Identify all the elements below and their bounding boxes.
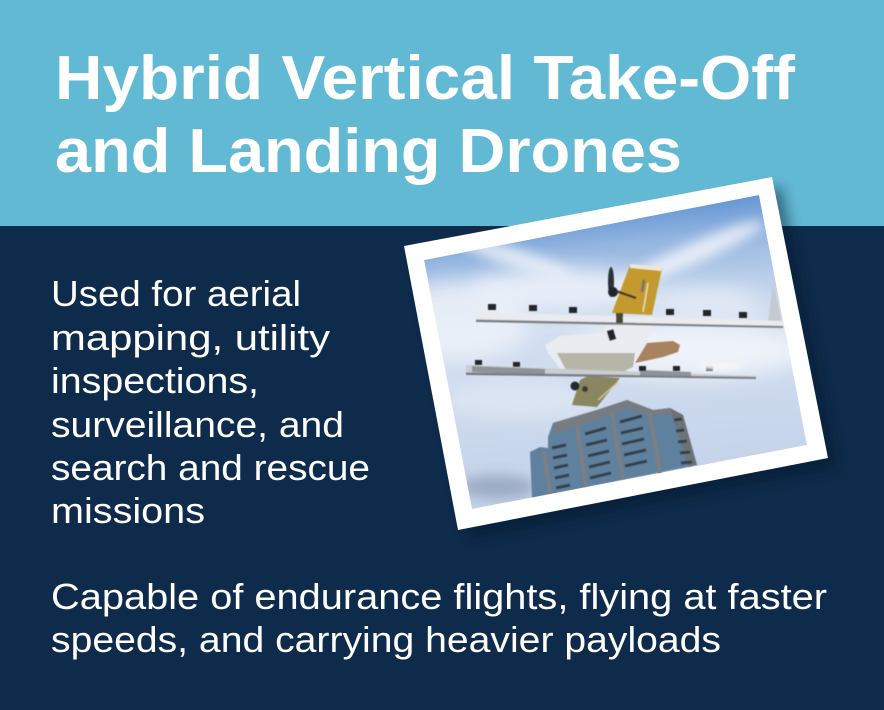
rear fin [768, 282, 782, 322]
rotor blur [704, 364, 738, 372]
clouds [427, 214, 792, 419]
title: and Landing Drones [55, 117, 682, 186]
text block: uses: missions [51, 490, 205, 531]
text block: uses: inspections, [51, 360, 259, 401]
title: Hybrid Vertical Take-Off [55, 44, 795, 113]
photo [390, 195, 810, 509]
text block: capabilities: Capable of endurance flights, flying at faster [51, 576, 827, 617]
photo card: drone over building [390, 177, 828, 530]
lower wing boom [466, 365, 756, 378]
front propeller [608, 267, 614, 297]
dark cloud patch [459, 475, 535, 499]
text block: uses: surveillance, and [51, 404, 344, 445]
upper wing [476, 313, 783, 326]
white photo frame [404, 177, 828, 530]
text block: uses: search and rescue [51, 447, 370, 488]
sky [424, 195, 807, 509]
title [55, 44, 795, 186]
fuselage belly [557, 353, 635, 372]
rotors [475, 304, 747, 371]
text block: capabilities [51, 576, 827, 660]
balconies [552, 416, 692, 488]
text block: uses [51, 273, 370, 531]
lower wing [572, 376, 620, 407]
text block: capabilities: speeds, and carrying heavier payloads [51, 619, 721, 660]
background: navy panel [0, 226, 884, 710]
upper yellow wing [612, 265, 662, 315]
photo card shadow [414, 187, 838, 540]
drone [466, 264, 783, 407]
building columns [544, 412, 660, 495]
building [530, 400, 697, 498]
text block: uses: mapping, utility [51, 317, 330, 358]
fuselage [545, 326, 652, 372]
text block: uses: Used for aerial [51, 273, 301, 314]
upper wing strut [616, 313, 623, 323]
header band [0, 0, 884, 226]
brown nose pod [635, 341, 680, 363]
